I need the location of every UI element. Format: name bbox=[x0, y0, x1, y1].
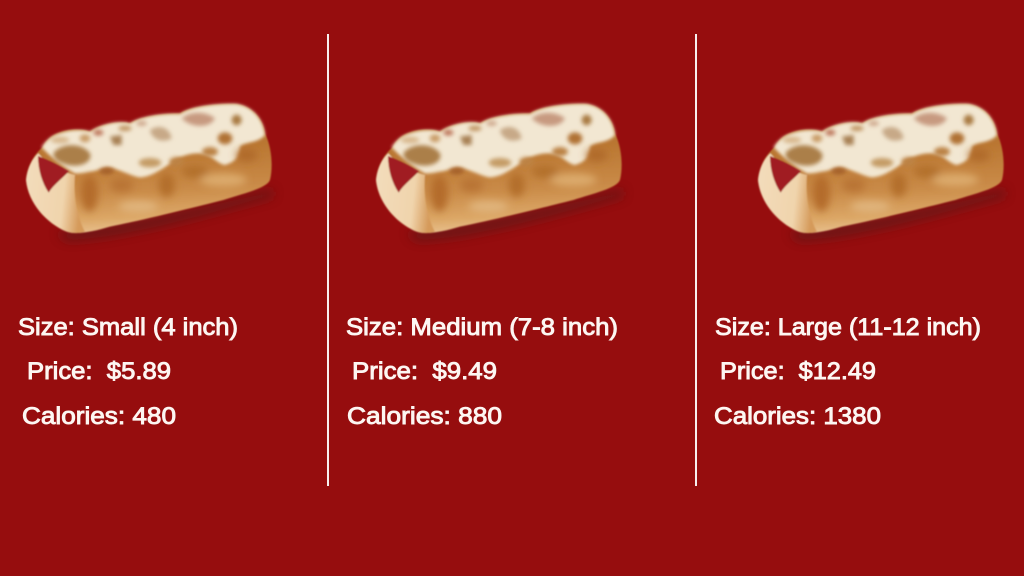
calories label: large: Calories: 1380 bbox=[714, 403, 881, 430]
price label: small: Price: $5.89 bbox=[27, 358, 171, 385]
price label: medium: Price: $9.49 bbox=[352, 358, 497, 385]
image: large sandwich bbox=[758, 104, 1005, 241]
price label: large: Price: $12.49 bbox=[720, 358, 876, 385]
image: medium sandwich bbox=[376, 104, 623, 241]
size label: medium: Size: Medium (7-8 inch) bbox=[346, 314, 618, 341]
divider line left bbox=[327, 34, 329, 486]
panel: large sandwich bbox=[714, 104, 1005, 430]
panel: medium sandwich bbox=[346, 104, 623, 430]
image: small sandwich bbox=[26, 104, 273, 241]
divider line right bbox=[695, 34, 697, 486]
calories label: small: Calories: 480 bbox=[22, 403, 176, 430]
calories label: medium: Calories: 880 bbox=[347, 403, 502, 430]
size label: large: Size: Large (11-12 inch) bbox=[715, 314, 981, 341]
panel: small sandwich bbox=[18, 104, 273, 430]
size label: small: Size: Small (4 inch) bbox=[18, 314, 238, 341]
